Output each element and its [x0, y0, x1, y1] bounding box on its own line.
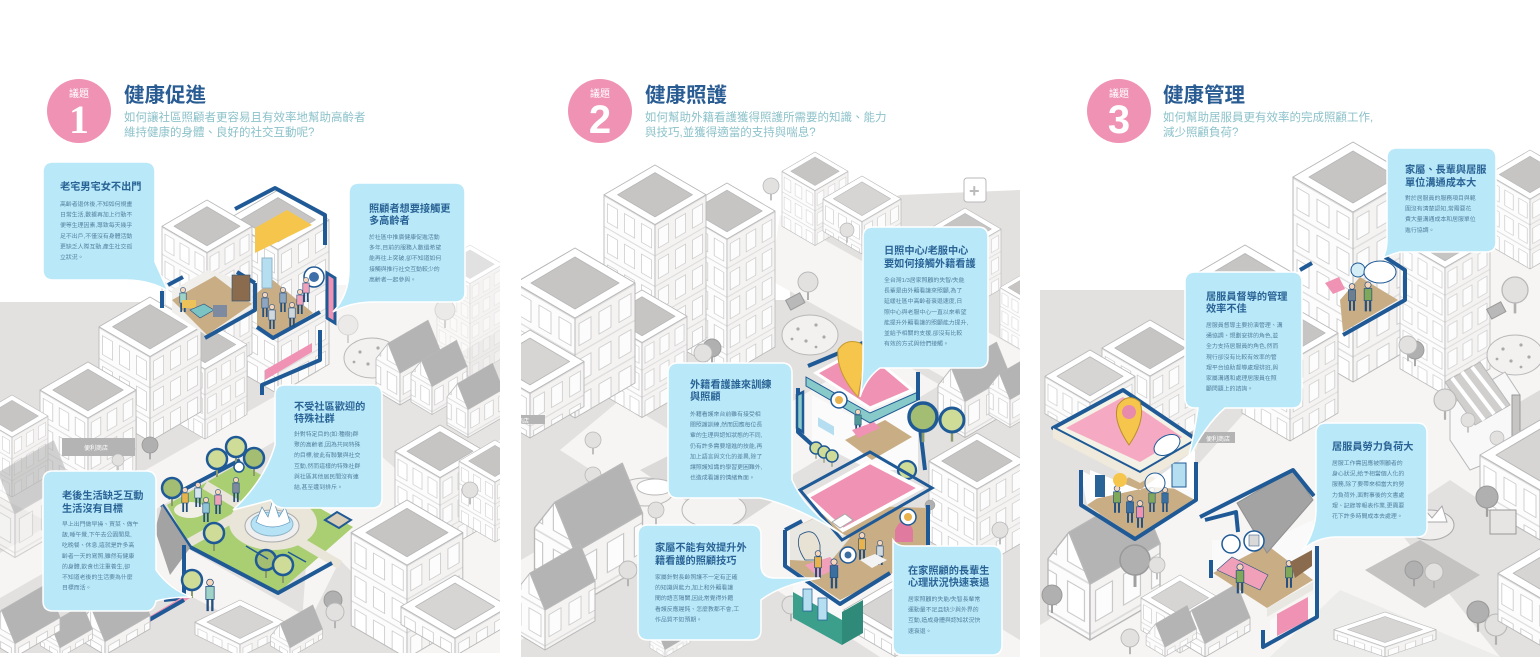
callout: supervisor efficiency: [1185, 272, 1302, 460]
callout: rapid decline at home: [893, 540, 1002, 655]
callout: who trains caregivers: 外籍看護誰來訓練: [690, 378, 772, 391]
callout: unwelcome special groups: 聚的高齡者,因為共同特殊: [294, 441, 361, 449]
header: topic 2: 與技巧,並獲得適當的支持與喘息?: [645, 125, 816, 139]
callout: life lacks goals: 老後生活缺乏互動: [62, 489, 144, 502]
callout: families cannot improve skills: 籍看護的照顧技巧: [655, 554, 736, 567]
callout: who trains caregivers: 也造成看護的情緒負面。: [690, 474, 755, 482]
callout: shut-in elderly: 立狀況。: [60, 253, 84, 261]
callout: supervisor efficiency: 家屬溝通和處理居服員在照: [1206, 374, 1277, 382]
highlighted home with grey gable roof: [1200, 470, 1318, 647]
highlighted service station with pink roof: [1053, 390, 1197, 539]
callout: rapid decline at home: 速衰退。: [908, 627, 932, 635]
header: topic 2: 如何幫助外籍看護獲得照護所需要的知識、能力: [645, 110, 886, 124]
callout: rapid decline at home: 運動量不足且缺少與外界的: [908, 606, 979, 614]
callout: life lacks goals: 吃晚餐、休息,這就是許多高: [62, 541, 134, 549]
callout: physical workload: 服務,除了要帶來相當大的勞: [1332, 480, 1404, 488]
callout: supervisor efficiency: 現行卻沒有比較有效率的管: [1206, 353, 1277, 361]
callout: who trains caregivers: 關照護訓練,然而因應每位長: [690, 421, 762, 429]
callout: supervisor efficiency: 居服員督導主要扮演管理、溝: [1206, 321, 1283, 329]
callout: unwelcome special groups: [233, 385, 382, 510]
callout: shut-in elderly: 日常生活,數據再加上行動不: [60, 211, 132, 219]
isometric city scene: care streets: +: [969, 181, 980, 201]
callout: supervisor efficiency: 通協調、規劃安排的角色,並: [1206, 332, 1278, 340]
callout: physical workload: 花下許多時間成本去處理。: [1332, 512, 1403, 520]
callout: unwelcome special groups: 特殊社群: [294, 412, 335, 425]
callout: reach foreign caregivers: 長輩是由外籍看護來照顧,為了: [884, 287, 962, 295]
callout: physical workload: 身心狀況,給予相當個人化的: [1332, 470, 1404, 478]
header: topic 2: 議題: [590, 87, 610, 100]
callout: communication cost: 費大量溝通成本和居服單位: [1405, 215, 1476, 223]
callout: unwelcome special groups: 的目標,彼此有聯繫與社交: [294, 451, 361, 459]
callout: communication cost: 家屬、長輩與居服: [1405, 163, 1487, 176]
callout: rapid decline at home: 互動,造成身體與認知狀況快: [908, 616, 980, 624]
highlighted lower home with cutaway room: [785, 452, 932, 645]
callout: shut-in elderly: [43, 162, 168, 291]
header: topic 1: 議題: [69, 87, 89, 100]
callout: shut-in elderly: 足不出戶,不僅沒有身體活動: [60, 232, 132, 240]
header: topic 2: [568, 79, 886, 143]
callout: unwelcome special groups: 與社區其他居民間沒有連: [294, 472, 359, 480]
header: topic 2: 2: [589, 98, 611, 142]
callout: reach foreign caregivers: [860, 227, 988, 397]
callout: life lacks goals: 齡者一天的寫照,雖然有健康: [62, 552, 134, 560]
callout: physical workload: 理、記錄等報表作業,更需要: [1332, 501, 1404, 509]
callout: who trains caregivers: 加上語言與文化的差異,除了: [690, 452, 762, 460]
park with fountain: [162, 437, 353, 593]
isometric city scene: neighbourhood: [0, 188, 531, 658]
highlighted building with cutaway rooms: [162, 188, 335, 395]
callout: reach foreign caregivers: 照中心與老服中心一直以來希望: [884, 308, 967, 316]
callout: communication cost: 圍沒有清楚認知,常需要花: [1405, 205, 1472, 213]
grey fountain plaza: [1406, 506, 1516, 540]
callout: unwelcome special groups: 結,甚至遭到排斥。: [294, 483, 343, 491]
header: topic 1: 如何讓社區照顧者更容易且有效率地幫助高齡者: [124, 110, 366, 124]
callout: who trains caregivers: [668, 363, 843, 535]
callout: who trains caregivers: 讓照護知識的學習更困難外,: [690, 463, 763, 471]
callout: families cannot improve skills: 間的語言隔閡,因此常覺得外籍: [655, 594, 733, 602]
callout: unwelcome special groups: 互動,然而這樣的特殊社群: [294, 462, 361, 470]
callout: communication cost: [1383, 148, 1496, 258]
callout: reach more elderly: 能再往上突破,卻不知道如何: [369, 254, 441, 262]
callout: rapid decline at home: 居家照顧的失能/失智長輩常: [908, 595, 980, 603]
walking person: [206, 579, 214, 611]
callout: life lacks goals: 不知道老後的生活要為什麼: [62, 573, 133, 581]
header: topic 3: 健康管理: [1163, 83, 1245, 107]
header: topic 3: 減少照顧負荷?: [1163, 125, 1238, 139]
callout: shut-in elderly: 便等生理因素,導致每天幾乎: [60, 221, 132, 229]
callout: reach foreign caregivers: 要如何接觸外籍看護: [884, 257, 976, 270]
header: topic 3: 如何幫助居服員更有效率的完成照顧工作,: [1163, 110, 1373, 124]
striped-awning store: [1445, 362, 1520, 470]
callout: who trains caregivers: 仍有許多需要增進的技能,再: [690, 442, 762, 450]
callout: who trains caregivers: 輩的生理與認知狀態的不同,: [690, 431, 763, 439]
callout: reach more elderly: 多高齡者: [369, 214, 410, 227]
callout: reach more elderly: 於社區中推廣健康促進活動: [369, 233, 440, 241]
callout: shut-in elderly: 老宅男宅女不出門: [60, 180, 142, 193]
header: topic 1: 健康促進: [124, 83, 206, 107]
callout: shut-in elderly: 高齡者退休後,不知如何規畫: [60, 200, 132, 208]
callout: life lacks goals: 的身體,飲食也注重養生,卻: [62, 562, 130, 570]
callout: who trains caregivers: 外籍看護來台前雖有接受相: [690, 410, 761, 418]
isometric city scene: neighbourhood: 便利商店: [84, 444, 108, 452]
header: topic 3: [1087, 79, 1373, 143]
callout: families cannot improve skills: 看護反應遲鈍、怎麼教都不會,工: [655, 605, 739, 613]
header: topic 1: 1: [69, 97, 89, 142]
callout: life lacks goals: 目標而活。: [62, 584, 91, 592]
callout: families cannot improve skills: 家屬不能有效提升外: [655, 541, 747, 554]
callout: who trains caregivers: 與照顧: [690, 391, 721, 403]
callout: supervisor efficiency: 全力支持居服員的角色,然而: [1206, 342, 1278, 350]
callout: life lacks goals: 早上出門做早操、買菜、做午: [62, 520, 139, 528]
callout: reach foreign caregivers: 全台灣1/3居家照顧的失智/失能: [884, 276, 965, 284]
isometric city scene: home service streets: 便利商店: [1206, 435, 1230, 443]
house beside park: [155, 505, 190, 575]
callout: supervisor efficiency: 居服員督導的管理: [1206, 290, 1288, 303]
callout: reach foreign caregivers: 並給予相關的支援,卻沒有比較: [884, 329, 962, 337]
panel: topic 1 health promotion: [0, 79, 531, 658]
callout: reach foreign caregivers: 有效的方式與他們接觸。: [884, 340, 949, 348]
callout: families cannot improve skills: [638, 525, 820, 640]
callout: reach foreign caregivers: 能提升外籍看護的照顧能力提升,: [884, 318, 968, 326]
callout: physical workload: 居服工作需因應被照顧者的: [1332, 459, 1403, 467]
highlighted upper care centre: [797, 340, 964, 486]
callout: reach foreign caregivers: 延緩社區中高齡者衰退速度,日: [884, 297, 962, 305]
callout: rapid decline at home: 心理狀況快速衰退: [908, 576, 990, 589]
isometric city scene: home service streets: [1040, 142, 1540, 657]
callout: shut-in elderly: 更缺乏人際互動,產生社交孤: [60, 242, 132, 250]
header: topic 3: 議題: [1109, 87, 1129, 100]
callout: supervisor efficiency: 顧問題上的諮詢。: [1206, 385, 1253, 393]
callout: communication cost: 進行協調。: [1405, 226, 1434, 234]
header: topic 1: [47, 79, 366, 143]
callout: reach more elderly: 高齡者一起參與。: [369, 275, 416, 283]
callout: reach foreign caregivers: 日照中心/老服中心: [884, 244, 968, 257]
callout: families cannot improve skills: 的知識與能力,加上和外籍看護: [655, 584, 733, 592]
callout: physical workload: 居服員勞力負荷大: [1332, 440, 1414, 453]
callout: life lacks goals: 飯,睡午覺,下午去公園閒晃,: [62, 531, 132, 539]
header: topic 2: 健康照護: [645, 83, 727, 107]
isometric city scene: care streets: 便利商店: [505, 417, 529, 425]
header: topic 1: 維持健康的身體、良好的社交互動呢?: [124, 125, 314, 139]
panel: topic 2 health care: [521, 79, 1020, 657]
highlighted meeting room: [1300, 257, 1405, 335]
callout: communication cost: 單位溝通成本大: [1405, 176, 1476, 189]
callout: families cannot improve skills: 家屬針對長齡照護不一定有正確: [655, 573, 738, 581]
callout: unwelcome special groups: 不受社區歡迎的: [294, 400, 365, 413]
callout: life lacks goals: [43, 471, 192, 611]
callout: supervisor efficiency: 理平台協助督導處理排班,與: [1206, 363, 1278, 371]
callout: life lacks goals: 生活沒有目標: [62, 502, 123, 515]
isometric city scene: care streets: [521, 152, 1020, 657]
plaza with fountain: [585, 467, 746, 528]
callout: reach more elderly: 多年,目前的服務人數還希望: [369, 244, 441, 252]
callout: families cannot improve skills: 作品質不如預期。: [655, 615, 702, 623]
callout: rapid decline at home: 在家照顧的長輩生: [908, 564, 990, 577]
callout: physical workload: 力負荷外,面對事後的文書處: [1332, 491, 1404, 499]
callout: reach more elderly: [333, 183, 465, 312]
callout: reach more elderly: 照顧者想要接觸更: [369, 202, 450, 215]
callout: unwelcome special groups: 針對特定目的(如:種樹)群: [294, 430, 359, 438]
callout: communication cost: 對於居服員的服務項目與範: [1405, 194, 1476, 202]
callout: reach more elderly: 接觸與推行社交互動較少的: [369, 265, 440, 273]
callout: supervisor efficiency: 效率不佳: [1206, 302, 1247, 315]
callout: physical workload: [1303, 423, 1427, 550]
panel: topic 3 health management: [1040, 79, 1540, 657]
header: topic 3: 3: [1108, 98, 1130, 142]
